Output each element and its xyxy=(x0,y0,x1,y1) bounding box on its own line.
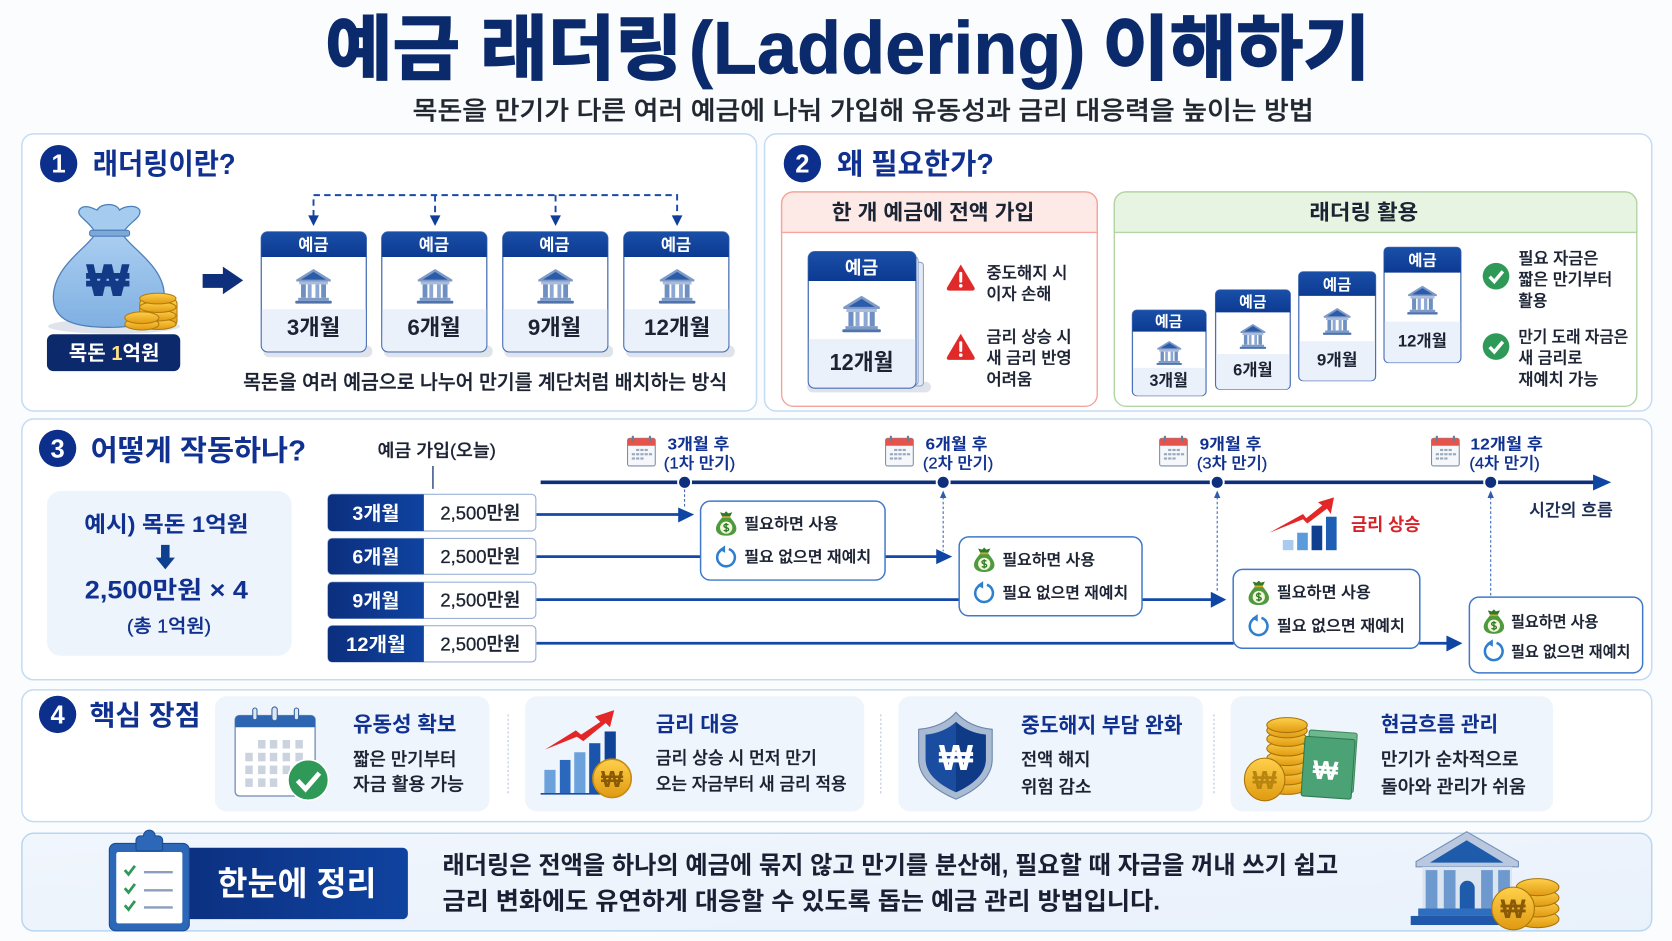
decision box: 12 months xyxy=(1469,597,1643,673)
milestone: 12개월 후 xyxy=(1432,435,1543,473)
deposit card: 3개월: 예금 xyxy=(298,236,329,255)
decision box: 12 months: 필요 없으면 재예치 xyxy=(1511,643,1630,661)
title: 예금 래더링 xyxy=(325,10,682,89)
warning: rate rise: 금리 상승 시 xyxy=(986,327,1072,346)
warning: early termination xyxy=(947,263,1067,304)
advantage card: cash flow: 돌아와 관리가 쉬움 xyxy=(1381,777,1526,797)
icon: chart with coin: ₩ xyxy=(601,766,624,792)
heading: 래더링이란?: 래더링이란? xyxy=(93,149,236,181)
warning: early termination: 이자 손해 xyxy=(986,285,1051,304)
start label xyxy=(377,440,496,489)
warning: rate rise xyxy=(947,327,1072,389)
decision box: 6 months: 필요하면 사용 xyxy=(1002,551,1095,569)
benefit: reinvest: 새 금리로 xyxy=(1518,349,1582,368)
section badge 1: 1 xyxy=(52,151,66,179)
label: time flow: 시간의 흐름 xyxy=(1529,501,1613,520)
summary label: 한눈에 정리 xyxy=(171,848,408,919)
warning: rate rise: 새 금리 반영 xyxy=(986,349,1072,368)
icon: money bag with coins: ₩ xyxy=(87,255,130,305)
title xyxy=(325,6,1370,90)
decision box: 9 months xyxy=(1233,569,1420,648)
advantage card: early termination: 위험 감소 xyxy=(1021,777,1091,797)
step card: 12개월: 12개월 xyxy=(1398,332,1447,351)
example box: 예시) 목돈 1억원 xyxy=(84,512,248,537)
milestone: 3개월 후: 3개월 후 xyxy=(668,435,730,453)
decision box: 3 months xyxy=(701,501,885,580)
benefit: reinvest: 만기 도래 자금은 xyxy=(1518,327,1628,346)
deposit card: 9개월: 9개월 xyxy=(528,315,581,340)
heading: 왜 필요한가?: 왜 필요한가? xyxy=(837,149,994,181)
label: 목돈 1억원 xyxy=(47,334,180,371)
row arrows xyxy=(536,508,1462,652)
decision box: 9 months: 필요 없으면 재예치 xyxy=(1277,617,1405,635)
decision box: 3 months: 필요 없으면 재예치 xyxy=(744,548,871,566)
milestone: 3개월 후 xyxy=(628,435,735,473)
start label: 예금 가입(오늘) xyxy=(377,440,496,460)
sub-heading: 래더링 활용 xyxy=(1309,202,1418,225)
deposit card: 9개월 xyxy=(503,232,613,357)
heading: 핵심 장점: 핵심 장점 xyxy=(90,700,200,731)
example box: 2,500만원 × 4 xyxy=(85,577,248,605)
advantage card: liquidity: 유동성 확보 xyxy=(353,713,456,736)
decision box: 6 months xyxy=(959,537,1142,616)
row: 6개월 2,500만원: 2,500만원 xyxy=(440,546,520,567)
panel: 2 why needed xyxy=(765,134,1652,411)
icon: chart with coin xyxy=(541,710,631,798)
sub-panel: laddering use xyxy=(1114,192,1637,406)
deposit card stack: 12개월: 12개월 xyxy=(830,349,894,375)
row: 9개월 2,500만원 xyxy=(328,582,536,618)
step card: 6개월: 예금 xyxy=(1239,294,1267,311)
advantage card: early termination: 중도해지 부담 완화 xyxy=(1021,715,1183,738)
panel: 4 key advantages xyxy=(22,690,1652,822)
benefit: reinvest xyxy=(1483,327,1628,389)
step card: 3개월: 예금 xyxy=(1155,313,1183,330)
row: 12개월 2,500만원: 2,500만원 xyxy=(440,633,520,654)
milestone: 6개월 후: (2차 만기) xyxy=(923,455,993,473)
advantage card: liquidity: 짧은 만기부터 xyxy=(353,750,456,770)
icon: coins and banknotes: ₩ xyxy=(1253,767,1278,795)
caption: 목돈을 여러 예금으로 나누어 만기를 계단처럼 배치하는 방식 xyxy=(243,372,727,394)
row: 6개월 2,500만원 xyxy=(328,538,536,574)
section badge 2 xyxy=(784,145,821,182)
step card: 12개월 xyxy=(1384,247,1461,363)
milestone: 9개월 후 xyxy=(1160,435,1267,473)
sub-panel: single deposit xyxy=(782,192,1097,406)
warning: early termination: 중도해지 시 xyxy=(986,263,1067,282)
summary text: 금리 변화에도 유연하게 대응할 수 있도록 돕는 예금 관리 방법입니다. xyxy=(443,888,1160,916)
dashed distribution arrows xyxy=(308,195,682,226)
benefit: short maturity: 활용 xyxy=(1518,292,1547,311)
decision box: 9 months: 필요하면 사용 xyxy=(1277,584,1371,602)
row: 3개월 2,500만원: 2,500만원 xyxy=(440,502,520,523)
section badge 4: 4 xyxy=(50,701,65,729)
milestone: 9개월 후: (3차 만기) xyxy=(1197,455,1267,473)
milestone: 12개월 후: 12개월 후 xyxy=(1470,435,1543,453)
step card: 3개월 xyxy=(1132,310,1206,396)
arrowheads for links xyxy=(940,490,1494,498)
icon: calendar check xyxy=(235,707,328,800)
milestone: 6개월 후: 6개월 후 xyxy=(926,435,988,453)
icon: clipboard xyxy=(109,830,189,931)
section badge 4 xyxy=(39,696,76,733)
deposit card: 6개월 xyxy=(382,232,493,357)
summary label: 한눈에 정리: 한눈에 정리 xyxy=(218,866,376,903)
step card: 9개월: 9개월 xyxy=(1317,351,1357,370)
heading: 어떻게 작동하나?: 어떻게 작동하나? xyxy=(91,436,306,468)
decision box: 6 months: 필요 없으면 재예치 xyxy=(1002,584,1128,602)
panel: 1 what is laddering xyxy=(22,134,757,411)
advantage card: early termination xyxy=(898,696,1203,811)
dotted links to timeline xyxy=(685,489,1491,597)
deposit card: 12개월 xyxy=(624,232,735,357)
step card: 9개월: 예금 xyxy=(1323,276,1351,294)
title: (Laddering) xyxy=(689,6,1086,90)
icon: coins and banknotes xyxy=(1244,718,1357,801)
icon: coins and banknotes: ₩ xyxy=(1312,755,1340,786)
advantage card: liquidity: 자금 활용 가능 xyxy=(353,775,464,795)
arrow: bag to deposits xyxy=(203,267,243,294)
advantage card: cash flow: 현금흐름 관리 xyxy=(1381,713,1498,736)
warning: rate rise: 어려움 xyxy=(986,370,1032,389)
summary text xyxy=(443,851,1338,916)
row: 9개월 2,500만원: 9개월 xyxy=(352,590,399,612)
step card: 6개월: 6개월 xyxy=(1233,360,1273,379)
advantage card: cash flow: 만기가 순차적으로 xyxy=(1381,750,1518,770)
milestone: 9개월 후: 9개월 후 xyxy=(1200,435,1262,453)
icon: shield: ₩ xyxy=(939,737,974,778)
row: 12개월 2,500만원 xyxy=(328,626,536,662)
milestone: 6개월 후 xyxy=(886,435,993,473)
decision box: 12 months: 필요하면 사용 xyxy=(1511,613,1598,631)
step card: 9개월 xyxy=(1299,272,1376,381)
deposit card: 9개월: 예금 xyxy=(539,236,570,255)
benefit: short maturity xyxy=(1483,249,1612,311)
section badge 1 xyxy=(40,145,77,182)
deposit card: 3개월 xyxy=(261,232,372,357)
section badge 3: 3 xyxy=(50,435,65,463)
advantage card: liquidity xyxy=(215,696,489,811)
timeline axis xyxy=(541,474,1611,490)
advantage card: rate response: 오는 자금부터 새 금리 적용 xyxy=(656,774,847,794)
step card: 12개월: 예금 xyxy=(1408,252,1437,270)
deposit card: 6개월: 6개월 xyxy=(407,315,461,340)
deposit card: 12개월: 12개월 xyxy=(644,315,710,340)
row: 6개월 2,500만원: 6개월 xyxy=(352,547,399,569)
advantage card: rate response: 금리 상승 시 먼저 만기 xyxy=(656,748,817,768)
deposit card: 3개월: 3개월 xyxy=(287,315,340,340)
panel: 3 how it works xyxy=(22,419,1652,680)
row: 3개월 2,500만원 xyxy=(328,494,536,531)
section badge 3 xyxy=(39,430,76,467)
advantage card: cash flow xyxy=(1231,696,1553,811)
benefit: short maturity: 짧은 만기부터 xyxy=(1518,270,1612,289)
panel: summary xyxy=(22,830,1652,931)
chart: rate rise: 금리 상승 xyxy=(1351,514,1420,534)
row: 3개월 2,500만원: 3개월 xyxy=(352,503,399,525)
deposit card: 6개월: 예금 xyxy=(419,236,449,255)
deposit card stack: 12개월: 예금 xyxy=(845,258,878,278)
step card: 6개월 xyxy=(1216,290,1290,389)
example box xyxy=(47,491,292,656)
section badge 2: 2 xyxy=(795,151,810,179)
icon: money bag with coins xyxy=(48,204,180,334)
advantage card: rate response xyxy=(525,696,864,811)
deposit card: 12개월: 예금 xyxy=(661,236,691,255)
sub-heading: 한 개 예금에 전액 가입 xyxy=(832,202,1034,225)
benefit: reinvest: 재예치 가능 xyxy=(1518,370,1598,389)
icon: bank with coins: ₩ xyxy=(1501,894,1527,924)
step card: 3개월: 3개월 xyxy=(1149,371,1188,390)
milestone: 3개월 후: (1차 만기) xyxy=(664,455,735,473)
advantage card: rate response: 금리 대응 xyxy=(656,713,739,736)
decision box: 3 months: 필요하면 사용 xyxy=(744,515,838,533)
label: 목돈 1억원: 목돈 1억원 xyxy=(69,342,159,365)
row: 9개월 2,500만원: 2,500만원 xyxy=(440,590,520,611)
icon: shield xyxy=(919,712,992,799)
benefit: short maturity: 필요 자금은 xyxy=(1518,249,1598,268)
milestone: 12개월 후: (4차 만기) xyxy=(1469,455,1540,473)
dotted separators xyxy=(508,714,1214,795)
row: 12개월 2,500만원: 12개월 xyxy=(346,634,406,656)
deposit card stack: 12개월 xyxy=(807,252,931,392)
title: 이해하기 xyxy=(1103,10,1370,89)
chart: rate rise xyxy=(1269,497,1420,550)
advantage card: early termination: 전액 해지 xyxy=(1021,750,1090,770)
example box: (총 1억원) xyxy=(127,615,211,636)
summary text: 래더링은 전액을 하나의 예금에 묶지 않고 만기를 분산해, 필요할 때 자금을 꺼내 쓰기 쉽고 xyxy=(443,851,1338,879)
subtitle: 목돈을 만기가 다른 여러 예금에 나눠 가입해 유동성과 금리 대응력을 높이는 방법 xyxy=(413,96,1314,125)
icon: bank with coins xyxy=(1411,832,1559,930)
